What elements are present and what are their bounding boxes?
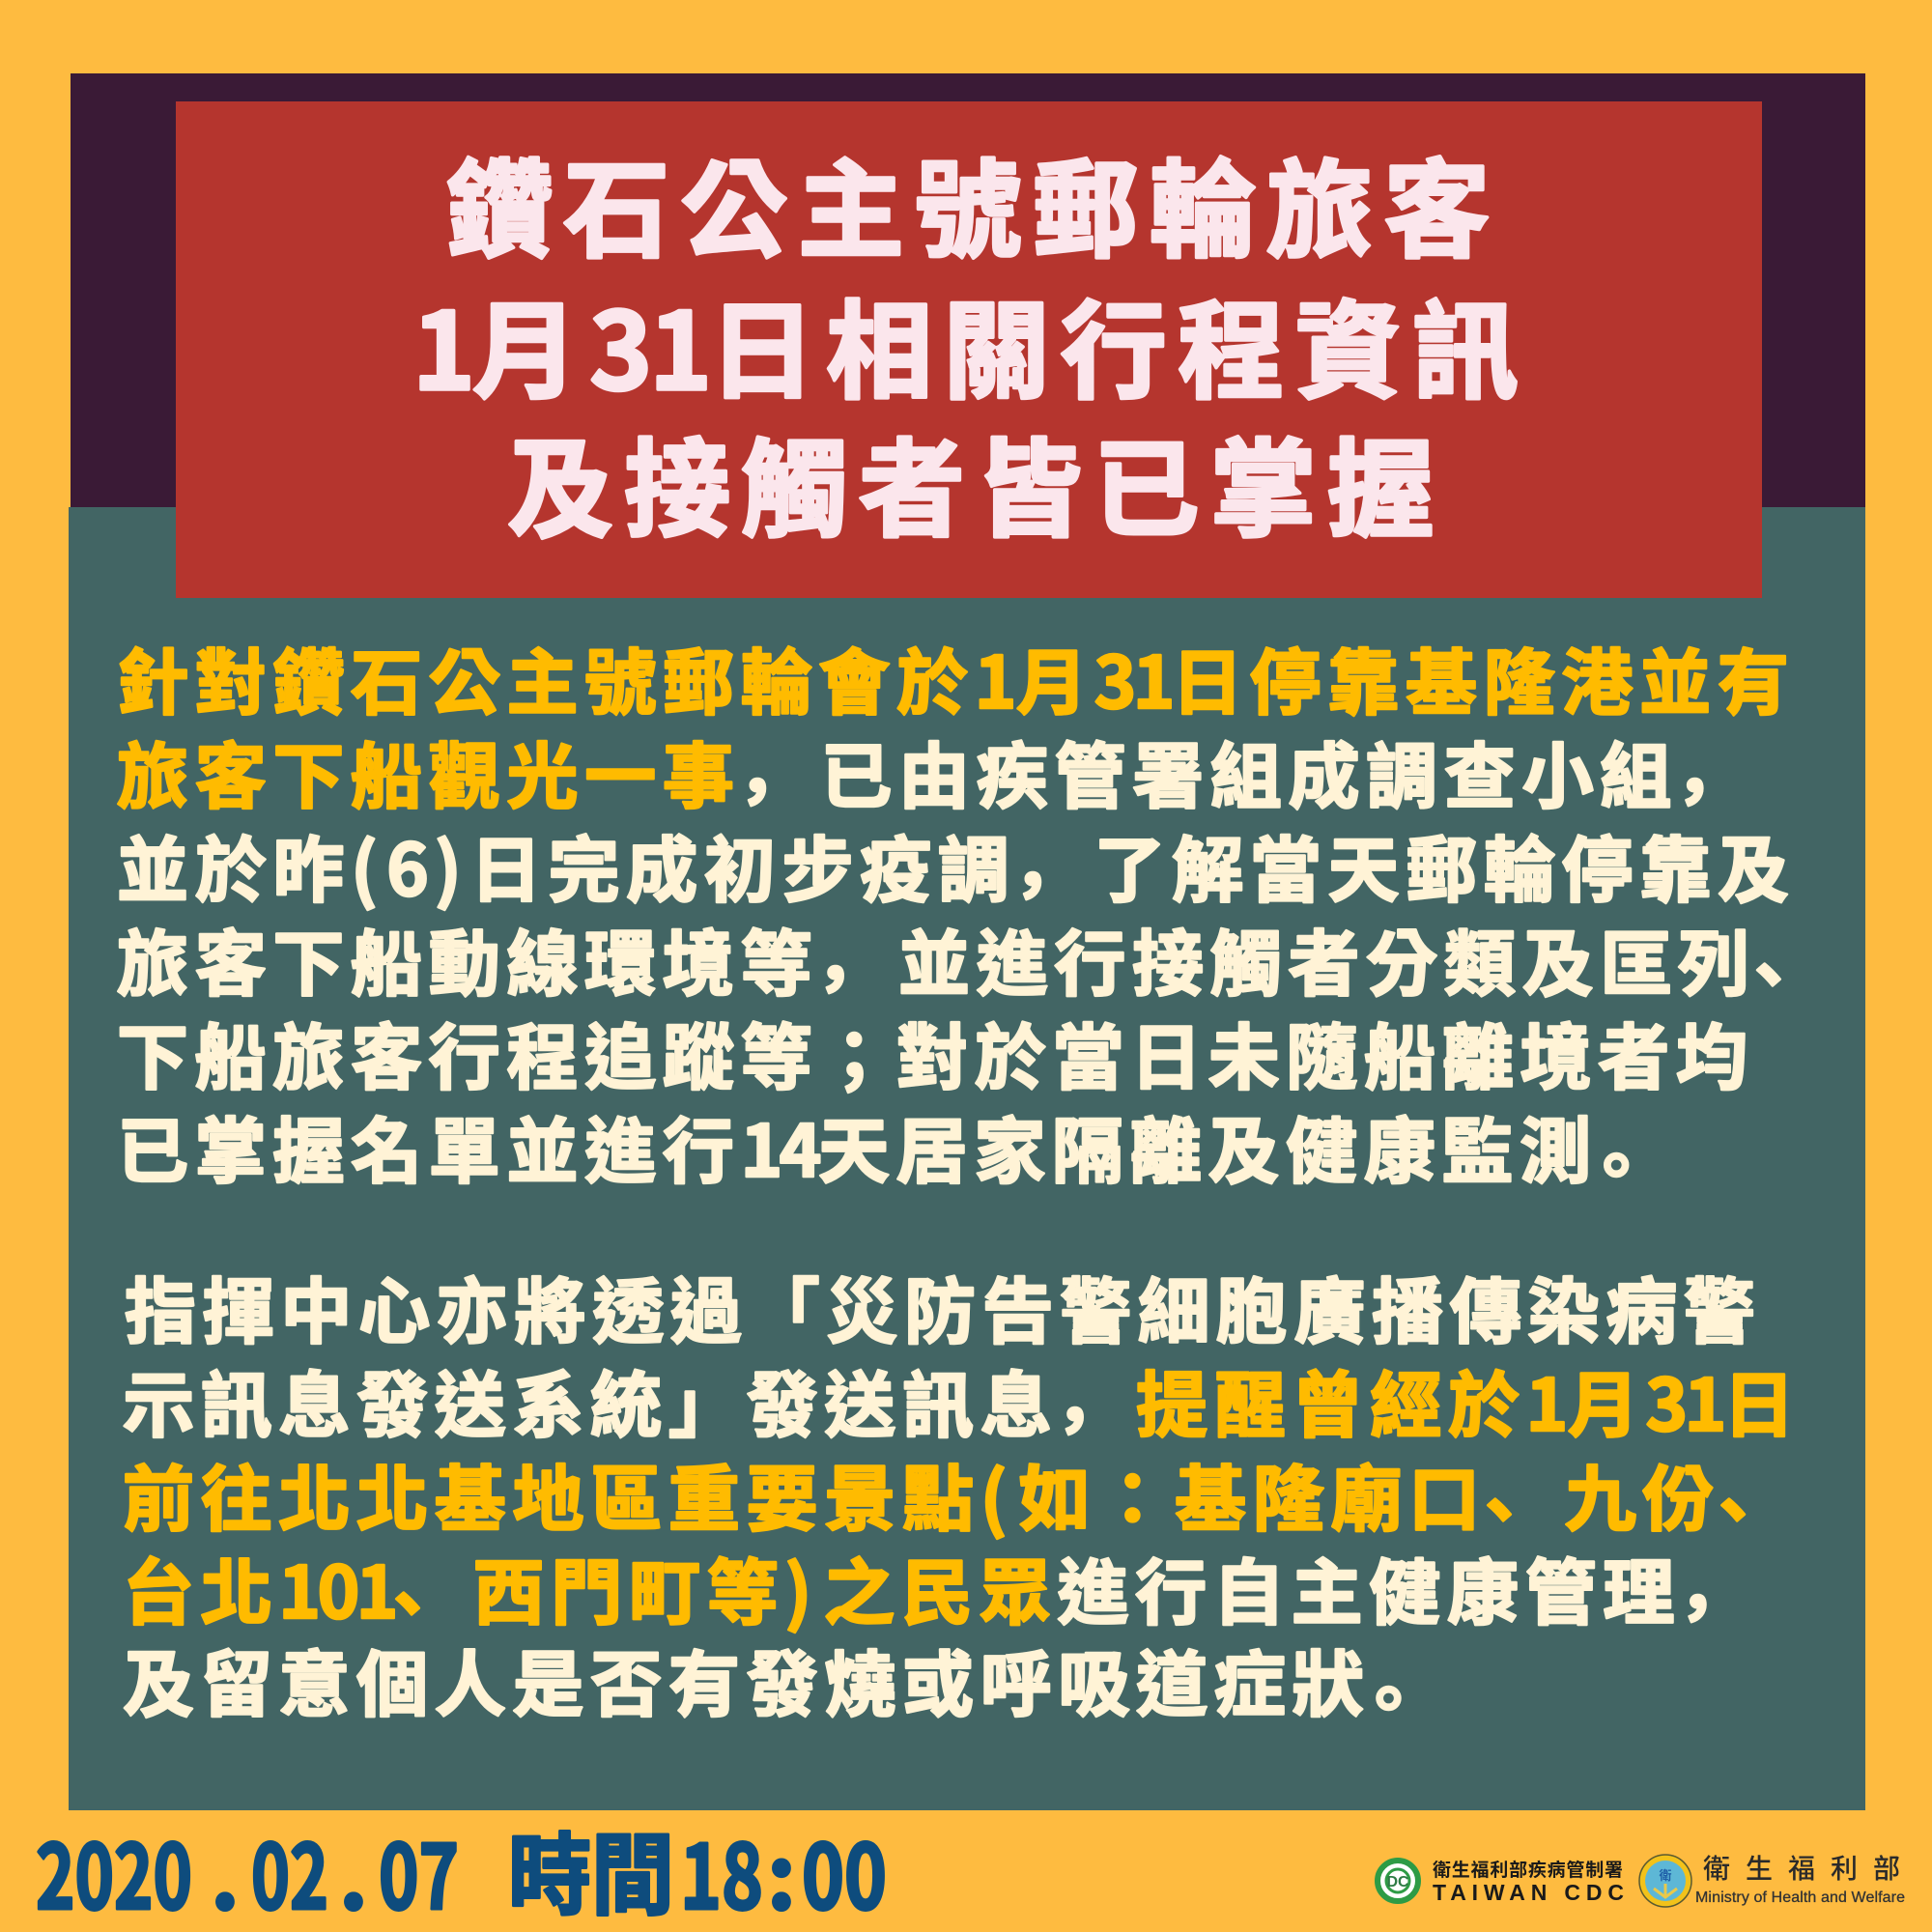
text block: paragraph 2: 份 [123,1442,1776,1557]
logo: Taiwan CDC: DC [1386,1874,1409,1890]
panel: teal content background [69,507,1865,1810]
text block: paragraph 2: 、 [1697,1454,1776,1557]
text block: paragraph 2: 門町等)之民眾進行自主健康管理 [551,1536,1681,1639]
date and time: 07 [379,1806,459,1932]
panel: dark purple header band [71,73,1865,507]
text block: paragraph 2: 台北101 [123,1536,395,1639]
text block: paragraph 1 [117,626,1810,1213]
text block: paragraph 2 [123,1255,1802,1747]
text block: paragraph 1: 並於昨(6)日完成初步疫調 [117,813,1016,917]
text block: paragraph 1: ， [1659,735,1737,838]
text block: paragraph 2: 。 [1352,1643,1431,1747]
text block: paragraph 1: ， [997,829,1074,932]
text block: paragraph 2: 、 [1463,1454,1542,1557]
text block: paragraph 1: 已 [820,720,898,823]
text block: paragraph 2: 指揮中心亦將透過「災防告警細胞廣播傳染病警 [125,1255,1762,1358]
text block: paragraph 2: 示訊息發送系統」發送訊息 [123,1349,1058,1452]
text block: paragraph 2: 前往北北基地區重要景點(如：基隆廟口 [123,1442,1487,1546]
title: 及接觸者皆已掌握 [507,404,1444,558]
date and time: 18 [680,1806,763,1932]
text block: paragraph 1: 旅客下船動線環境等 [117,907,818,1010]
logo: Ministry of Health and Welfare: 衛 [1659,1865,1672,1884]
text block: paragraph 1: 旅客下船觀光一事 [117,720,741,823]
text block: paragraph 1: ， [722,735,799,838]
title [412,125,1529,558]
text block: paragraph 1: 並 [898,907,977,1010]
text block: paragraph 1: 由疾管署組成調查小組 [898,720,1678,823]
text block: paragraph 1: 已掌握名單並進行14天居家隔離及健康監測 [117,1094,1598,1198]
text block: paragraph 1: 針對鑽石公主號郵輪會於1月31日停靠基隆港並有 [117,626,1796,729]
title: 鑽石公主號郵輪旅客 [446,125,1501,279]
text block: paragraph 1: 。 [1580,1110,1659,1213]
text block: paragraph 1: 解當天郵輪停靠及 [1172,813,1796,917]
date and time: . [339,1806,368,1932]
date and time: 2020 [36,1806,192,1932]
logo: Ministry of Health and Welfare: Ministry of Health and Welfare [1695,1889,1905,1906]
text block: paragraph 1: 、 [1733,919,1810,1022]
text block: paragraph 2: 西 [473,1536,551,1639]
logo: Ministry of Health and Welfare [1639,1848,1905,1907]
text block: paragraph 1: 進行接觸者分類及匡列 [977,907,1756,1010]
logo: Taiwan CDC: TAIWAN CDC [1433,1880,1624,1905]
text block: paragraph 2: 醒曾經於1月31日 [1214,1349,1802,1452]
date and time: 00 [802,1806,887,1932]
text block: paragraph 2: 及留意個人是否有發燒或呼吸道症狀 [123,1628,1370,1731]
text block: paragraph 2: 、 [372,1548,450,1651]
text block: paragraph 2: 九 [1565,1442,1642,1546]
text block: paragraph 2: 提 [1136,1349,1214,1452]
date and time: . [211,1806,240,1932]
date and time [36,1804,887,1932]
text block: paragraph 2: ， [1662,1551,1740,1655]
text block: paragraph 1: 下船旅客行程追蹤等；對於當日未隨船離境者均 [117,1001,1754,1104]
date and time: 時間 [508,1804,674,1932]
logo: Taiwan CDC: 衛生福利部疾病管制署 [1433,1856,1623,1882]
title: 1月31日相關行程資訊 [412,266,1529,420]
panel: red title box [176,101,1762,598]
logo: Taiwan CDC [1378,1856,1624,1905]
logo: Ministry of Health and Welfare: 衛生福利部 [1703,1848,1900,1887]
date and time: 02 [251,1806,328,1932]
text block: paragraph 2: ， [1038,1364,1117,1467]
date and time: : [767,1806,796,1932]
text block: paragraph 1: ， [799,923,877,1026]
text block: paragraph 1: 了 [1094,813,1172,917]
